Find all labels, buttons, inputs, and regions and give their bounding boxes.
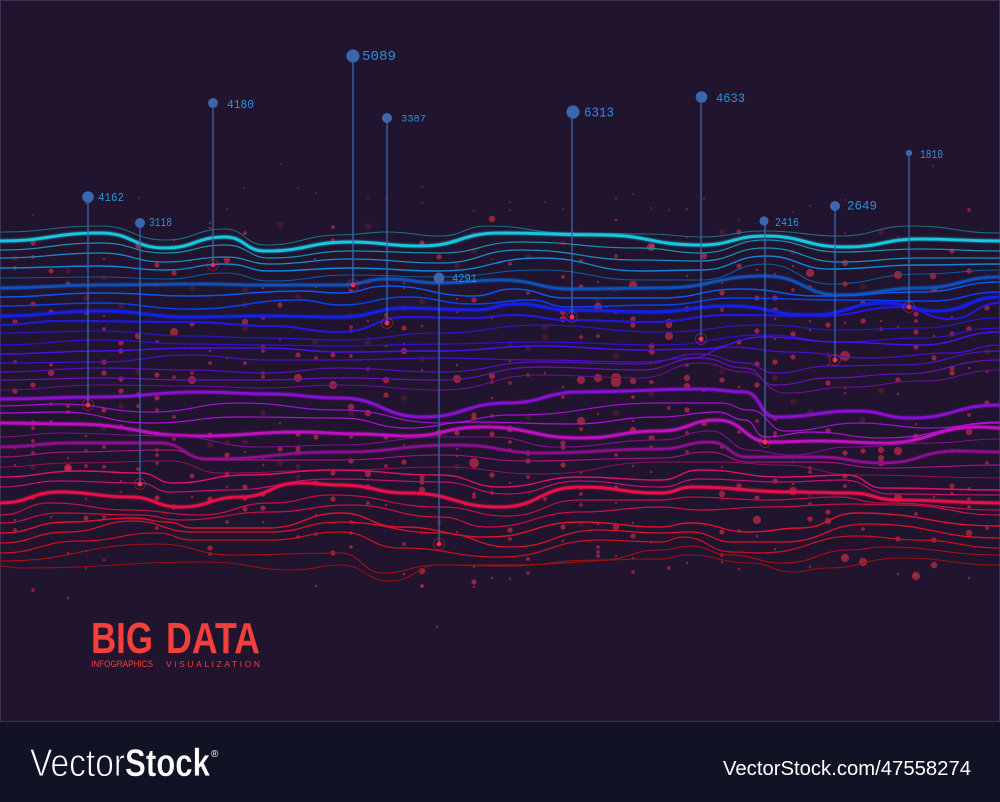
- line: thick dark blue: [0, 276, 1000, 295]
- footer id: VectorStock.com/47558274: VectorStock.com/47558274: [723, 757, 971, 780]
- pin: 2649: 2649: [847, 200, 877, 214]
- line: thick magenta: [0, 420, 1000, 443]
- pin: 5089: [346, 49, 396, 290]
- title: BIG DATA: VISUALIZATION: [166, 659, 260, 669]
- pin: 6313: [566, 105, 614, 323]
- pin: 3118: [134, 217, 172, 490]
- line: teal top: [0, 226, 1000, 245]
- footer logo: VectorStock: Vector: [30, 742, 125, 785]
- pin: 4180: 4180: [227, 98, 254, 112]
- pin: 2416: [759, 216, 799, 448]
- line: thick cyan: [0, 233, 1000, 251]
- pin: 4291: [434, 272, 477, 550]
- line: dull magenta band: [0, 442, 1000, 463]
- particle scatter: [15, 164, 987, 627]
- pin: 4291: 4291: [452, 272, 477, 286]
- title: BIG DATA: [91, 614, 260, 670]
- line: thick bright blue: [0, 297, 1000, 317]
- title: BIG DATA: INFOGRAPHICS: [91, 659, 153, 670]
- pin: 3118: 3118: [149, 217, 172, 230]
- footer bar: [0, 722, 1000, 802]
- pin: 6313: 6313: [584, 106, 614, 122]
- pin: 4162: 4162: [98, 192, 124, 205]
- title: BIG DATA: DATA: [166, 614, 260, 663]
- footer logo: VectorStock: ®: [211, 749, 219, 760]
- pin: 4180: [208, 98, 254, 270]
- pin: 4633: 4633: [716, 92, 745, 106]
- pin: 3387: 3387: [401, 114, 426, 126]
- pin: 1810: 1810: [920, 149, 943, 162]
- footer logo: VectorStock: [30, 742, 219, 785]
- pin: 1810: [904, 149, 943, 312]
- pin: 3387: [382, 113, 426, 328]
- footer logo: VectorStock: Stock: [125, 742, 210, 785]
- line: thick red: [0, 483, 1000, 507]
- pin: 5089: 5089: [362, 49, 396, 65]
- pin: 4633: [696, 91, 745, 344]
- title: BIG DATA: BIG: [91, 614, 153, 663]
- pin: 2649: [830, 200, 877, 366]
- pin: 2416: 2416: [775, 216, 799, 230]
- line: thick purple: [0, 389, 1000, 418]
- wave lines: blue to red data strata: [0, 226, 1000, 581]
- pin: 4162: [82, 191, 124, 410]
- line: pink red: [0, 470, 1000, 490]
